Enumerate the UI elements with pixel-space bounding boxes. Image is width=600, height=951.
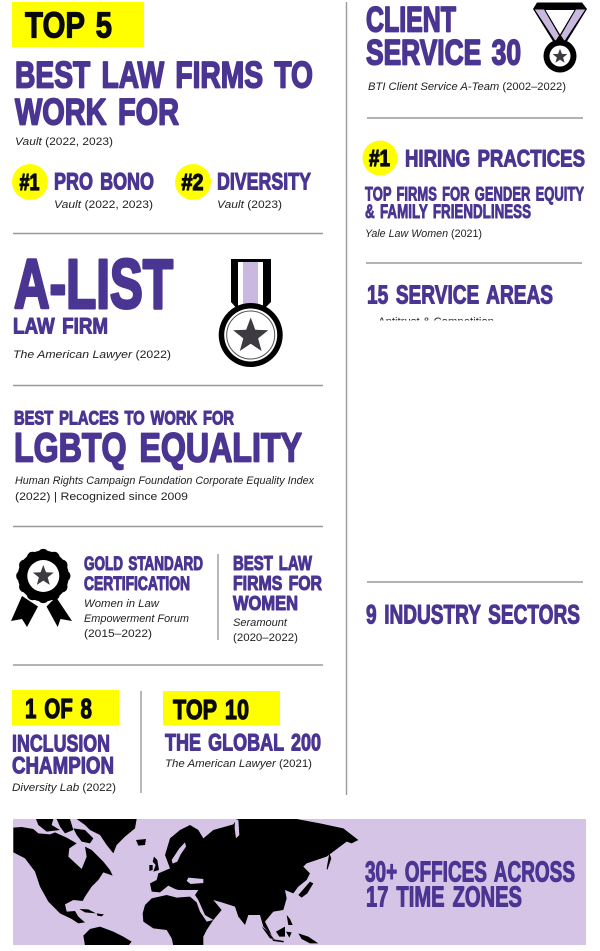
panel: a-list law firm: [13, 245, 173, 361]
award: top 10 global 200: TOP 10: [173, 694, 249, 725]
panel: client service 30: [366, 0, 566, 93]
award: #2 diversity: #2: [182, 169, 204, 195]
text: offices across time zones: 17 TIME ZONES: [366, 882, 522, 914]
panel: client service 30: CLIENT: [366, 0, 456, 40]
award: #1 pro bono: Vault (2022, 2023): [54, 199, 153, 211]
badge: top 5: TOP 5: [25, 4, 112, 46]
award: 1 of 8 inclusion champion: CHAMPION: [12, 752, 114, 780]
award: top 10 global 200: [163, 691, 321, 770]
award: #1 hiring practices: & FAMILY FRIENDLINESS: [365, 202, 531, 223]
panel: top 5 best law firms to work for: [12, 2, 313, 148]
panel: a-list law firm: The American Lawyer (2022): [13, 349, 171, 361]
panel: client service 30: SERVICE 30: [366, 34, 521, 72]
panel: a-list law firm: A-LIST: [14, 245, 173, 323]
panel: client service 30: BTI Client Service A-Team (2002–2022): [368, 81, 566, 93]
text: offices across time zones: [365, 856, 575, 914]
award: 1 of 8 inclusion champion: [12, 690, 119, 794]
panel: lgbtq equality: LGBTQ EQUALITY: [14, 424, 302, 470]
icon: small medal: [533, 2, 587, 72]
award: gold standard certification: Women in Law: [84, 598, 160, 610]
panel: 15 service areas: [368, 284, 553, 320]
heading: best law firms to work for: WORK FOR: [15, 92, 179, 132]
award: best law firms for women: [233, 553, 322, 644]
award: 1 of 8 inclusion champion: 1 OF 8: [25, 693, 92, 724]
icon: rosette badge: [11, 549, 72, 627]
award: #1 pro bono: PRO BONO: [54, 168, 154, 196]
award: best law firms for women: FIRMS FOR: [233, 573, 322, 595]
icon: medal: [219, 259, 283, 367]
award: 1 of 8 inclusion champion: INCLUSION: [12, 730, 110, 758]
award: #2 diversity: [175, 164, 311, 211]
heading: best law firms to work for: BEST LAW FIRMS TO: [15, 54, 313, 96]
award: #1 hiring practices: #1: [369, 145, 390, 171]
source: Vault 2022, 2023: Vault (2022, 2023): [15, 136, 113, 148]
panel: lgbtq equality: BEST PLACES TO WORK FOR: [14, 408, 234, 430]
panel: lgbtq equality: [14, 408, 314, 503]
award: best law firms for women: Seramount: [233, 617, 288, 629]
award: gold standard certification: CERTIFICATION: [84, 574, 190, 595]
award: top 10 global 200: The American Lawyer (2021): [165, 758, 312, 770]
award: #1 pro bono: #1: [20, 169, 40, 195]
map: world: [13, 819, 358, 946]
award: best law firms for women: BEST LAW: [233, 553, 312, 575]
award: #1 hiring practices: [362, 140, 585, 240]
award: gold standard certification: [84, 554, 203, 640]
award: 1 of 8 inclusion champion: Diversity Lab (2022): [12, 782, 116, 794]
award: #1 hiring practices: Yale Law Women (2021): [365, 228, 482, 240]
award: best law firms for women: (2020–2022): [233, 632, 298, 644]
panel: 15 service areas: Antitrust & Competition: [378, 316, 494, 328]
heading: best law firms to work for: [15, 54, 313, 132]
award: #1 pro bono: [12, 164, 154, 211]
award: top 10 global 200: THE GLOBAL 200: [165, 730, 321, 756]
panel: a-list law firm: LAW FIRM: [13, 314, 108, 338]
award: best law firms for women: WOMEN: [233, 593, 298, 615]
panel: lgbtq equality: Human Rights Campaign Foundation Corporate Equality Index: [15, 475, 314, 487]
award: #2 diversity: Vault (2023): [217, 199, 282, 211]
panel: world map banner: [13, 819, 586, 946]
award: gold standard certification: (2015–2022): [84, 628, 152, 640]
award: #2 diversity: DIVERSITY: [217, 168, 311, 196]
panel: lgbtq equality: (2022) | Recognized since 2009: [15, 491, 188, 503]
award: gold standard certification: Empowerment Forum: [84, 613, 189, 625]
award: gold standard certification: GOLD STANDARD: [84, 554, 203, 575]
